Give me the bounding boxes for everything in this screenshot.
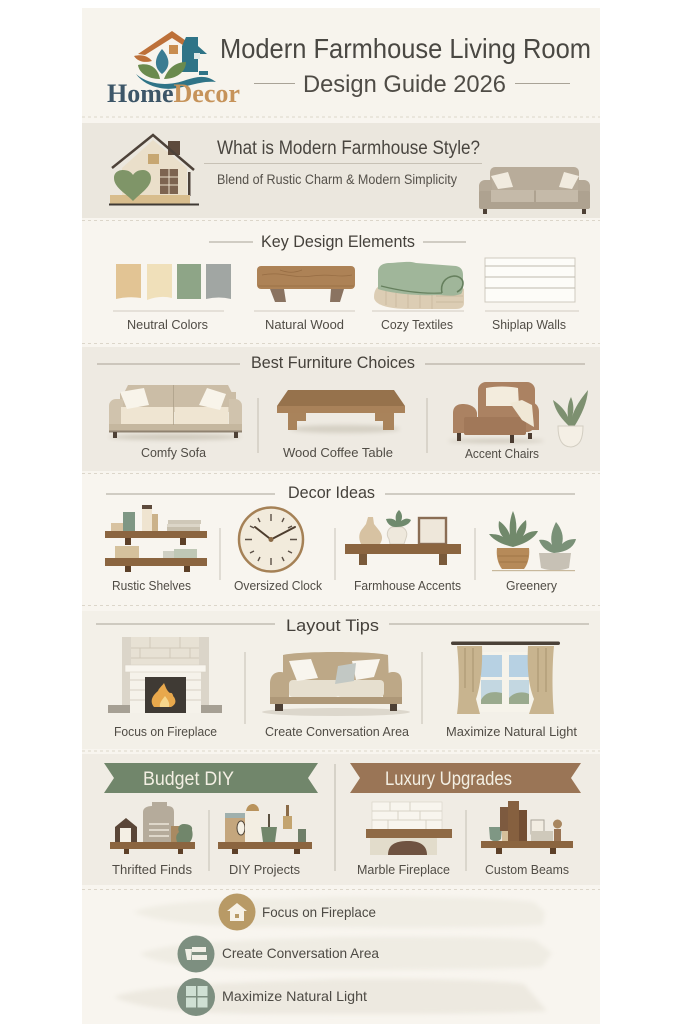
item: neutral colors bbox=[113, 264, 231, 332]
item: oversized clock bbox=[234, 508, 322, 593]
banner: budget diy: Budget DIY bbox=[143, 769, 234, 790]
item: shiplap walls bbox=[485, 258, 579, 332]
tip: maximize natural light bbox=[114, 978, 547, 1016]
icon: farmhouse with heart bbox=[109, 135, 199, 206]
item: fireplace bbox=[108, 637, 222, 739]
title: Modern Farmhouse Living Room bbox=[220, 33, 591, 64]
page background bbox=[82, 8, 600, 1024]
banner: luxury upgrades bbox=[350, 763, 581, 793]
item: comfy sofa: Comfy Sofa bbox=[141, 445, 207, 460]
tip: focus on fireplace bbox=[133, 894, 545, 930]
item: thrifted finds bbox=[110, 802, 195, 877]
logo wordmark: HomeDecor bbox=[107, 79, 240, 108]
tip: focus on fireplace: Focus on Fireplace bbox=[262, 904, 376, 920]
item: comfy sofa bbox=[109, 385, 242, 460]
heading: key design elements: Key Design Elements bbox=[261, 232, 415, 251]
item: conversation sofa bbox=[262, 652, 410, 739]
item: custom beams: Custom Beams bbox=[485, 862, 569, 877]
item: custom beams bbox=[481, 801, 573, 877]
item: natural wood: Natural Wood bbox=[265, 317, 344, 332]
panel: budget and luxury bbox=[82, 754, 600, 885]
subtitle: Design Guide 2026 bbox=[303, 71, 506, 98]
item: wood coffee table: Wood Coffee Table bbox=[283, 445, 393, 460]
item: farmhouse accents bbox=[345, 510, 461, 593]
item: diy projects bbox=[218, 804, 312, 877]
item: thrifted finds: Thrifted Finds bbox=[112, 862, 192, 877]
item: conversation sofa: Create Conversation Area bbox=[265, 724, 410, 739]
item: shiplap walls: Shiplap Walls bbox=[492, 317, 566, 332]
banner: luxury upgrades: Luxury Upgrades bbox=[385, 769, 512, 790]
heading: what is modern farmhouse style: What is Modern Farmhouse Style? bbox=[217, 138, 480, 159]
item: oversized clock: Oversized Clock bbox=[234, 578, 322, 593]
description: Blend of Rustic Charm & Modern Simplicity bbox=[217, 172, 457, 187]
item: cozy textiles: Cozy Textiles bbox=[381, 317, 453, 332]
item: wood coffee table bbox=[277, 390, 405, 460]
panel: best furniture choices bbox=[82, 347, 600, 471]
item: greenery bbox=[489, 511, 576, 593]
item: marble fireplace: Marble Fireplace bbox=[357, 862, 450, 877]
tip: maximize natural light: Maximize Natural Light bbox=[222, 988, 367, 1004]
panel: what is modern farmhouse style bbox=[82, 123, 600, 218]
icon: sofa bbox=[479, 167, 590, 214]
item: fireplace: Focus on Fireplace bbox=[114, 724, 217, 739]
heading: best furniture choices: Best Furniture Choices bbox=[251, 353, 415, 372]
panel: quick tips bbox=[114, 894, 552, 1016]
icon: potted plant bbox=[553, 390, 588, 447]
heading: layout tips: Layout Tips bbox=[286, 616, 379, 635]
item: natural wood bbox=[254, 266, 355, 332]
item: greenery: Greenery bbox=[506, 578, 557, 593]
banner: budget diy bbox=[104, 763, 318, 793]
item: accent chairs bbox=[448, 382, 544, 461]
item: diy projects: DIY Projects bbox=[229, 862, 300, 877]
item: accent chairs: Accent Chairs bbox=[465, 446, 539, 461]
tip: create conversation area bbox=[140, 936, 552, 972]
panel: key design elements bbox=[82, 222, 600, 342]
panel: header bbox=[82, 8, 600, 116]
heading: decor ideas: Decor Ideas bbox=[288, 483, 375, 502]
panel: decor ideas bbox=[82, 475, 600, 604]
panel: layout tips bbox=[82, 611, 600, 749]
item: cozy textiles bbox=[372, 262, 464, 332]
item: farmhouse accents: Farmhouse Accents bbox=[354, 578, 461, 593]
item: window with curtains: Maximize Natural Light bbox=[446, 724, 577, 739]
item: rustic shelves: Rustic Shelves bbox=[112, 578, 191, 593]
item: neutral colors: Neutral Colors bbox=[127, 317, 208, 332]
item: window with curtains bbox=[446, 642, 577, 739]
item: rustic shelves bbox=[105, 505, 207, 593]
tip: create conversation area: Create Conversation Area bbox=[222, 945, 379, 961]
item: marble fireplace bbox=[357, 802, 452, 877]
logo: HomeDecor bbox=[107, 31, 240, 108]
